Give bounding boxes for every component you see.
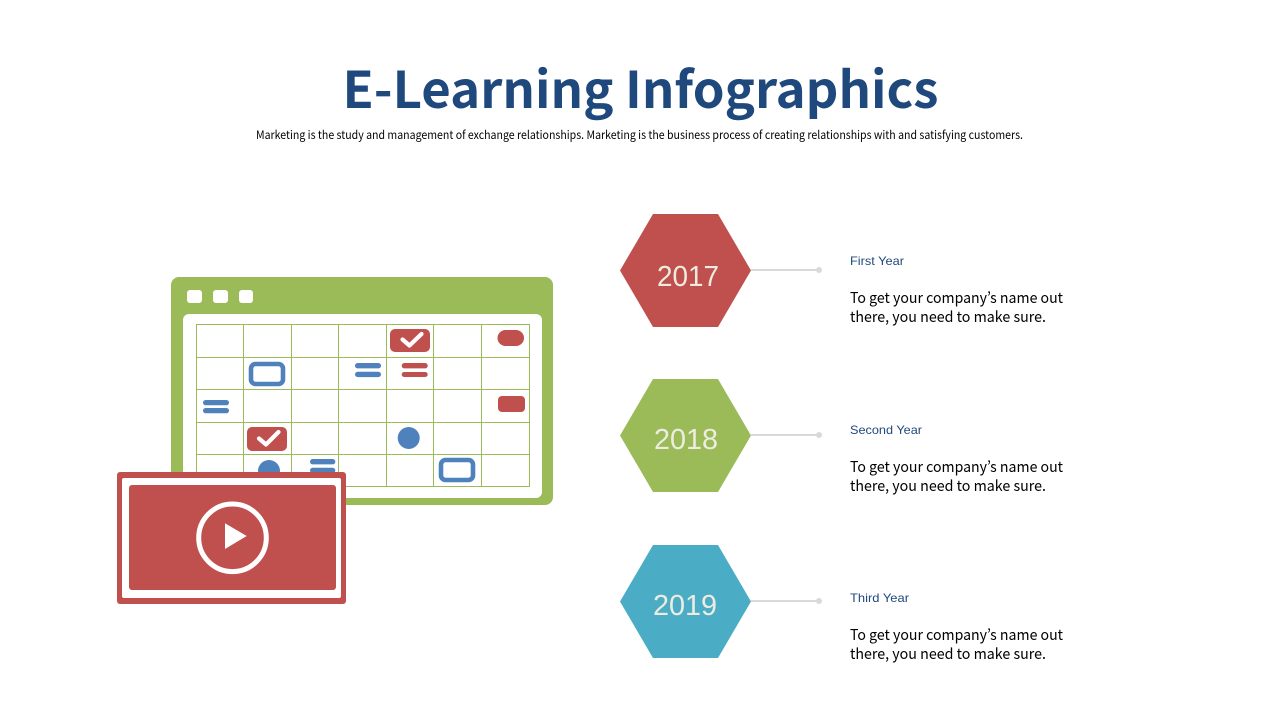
connector line [751, 598, 822, 604]
description: To get your company’s name out [850, 456, 1063, 477]
calendar item: red rectangle row 3 [498, 396, 525, 412]
heading: Third Year [850, 591, 909, 605]
description: To get your company’s name out [850, 287, 1063, 308]
timeline item: 2018 [620, 379, 1066, 496]
panel: video player [117, 472, 346, 604]
connector line [751, 267, 822, 273]
year: 2019 [653, 590, 717, 622]
illustration: e-learning calendar and video [117, 277, 553, 604]
video white border [122, 478, 341, 598]
calendar grid [196, 324, 530, 486]
heading: First Year [850, 254, 904, 268]
description: To get your company’s name out [850, 624, 1063, 645]
window content area [183, 314, 542, 498]
hexagon [620, 545, 751, 658]
window buttons [187, 290, 253, 303]
timeline item: 2019 [620, 545, 1066, 664]
connector line [751, 432, 822, 438]
icon: play button [199, 504, 266, 572]
title: E-Learning Infographics [342, 49, 938, 123]
calendar item: blue outlined box row 5 [441, 460, 473, 480]
timeline item: 2017 [620, 214, 1066, 327]
subtitle: Marketing is the study and management of exchange relationships. Marketing is the business process of creating relationships with and satisfying customers. [256, 127, 1023, 143]
calendar item: red pill [498, 330, 524, 346]
panel: browser calendar window [171, 277, 553, 505]
description: there, you need to make sure. [850, 306, 1046, 327]
video frame [117, 472, 346, 604]
description: there, you need to make sure. [850, 475, 1046, 496]
calendar item: blue circle row 5 [258, 460, 280, 482]
calendar item: blue lines row 2 [355, 363, 381, 377]
year: 2018 [654, 424, 718, 456]
calendar item: red checked box row 1 [390, 329, 430, 352]
year: 2017 [657, 261, 719, 293]
hexagon [620, 214, 751, 327]
calendar item: red lines row 2 [402, 363, 428, 377]
calendar item: blue outlined box row 2 [251, 364, 283, 384]
window frame [171, 277, 553, 505]
calendar item: blue lines row 3 [203, 400, 229, 413]
calendar item: blue lines row 5 [310, 459, 335, 473]
calendar item: blue circle row 4 [398, 427, 420, 449]
description: there, you need to make sure. [850, 643, 1046, 664]
video screen [129, 485, 336, 590]
heading: Second Year [850, 423, 922, 437]
hexagon [620, 379, 751, 492]
calendar item: red checked box row 4 [247, 427, 287, 451]
